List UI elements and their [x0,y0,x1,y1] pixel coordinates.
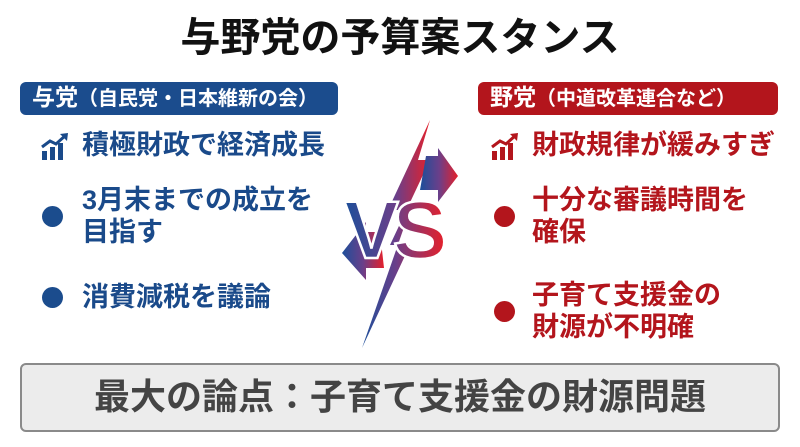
left item 2 [42,185,313,247]
label: opposition: 野党（中道改革連合など） [490,84,736,110]
right item 2: 十分な審議時間を [532,185,748,215]
bottom callout [20,363,780,432]
label: ruling party: 与党（自民党・日本維新の会） [32,84,318,110]
VS emblem: VS [344,185,445,276]
right item 3: 子育て支援金の [532,280,721,310]
icon: chart up red [491,133,518,160]
right item 2 [494,185,748,247]
bottom callout: 最大の論点：子育て支援金の財源問題 [94,376,706,417]
left item 1: 積極財政で経済成長 [82,130,325,160]
VS emblem [342,120,458,348]
label: opposition [478,82,778,115]
right item 3: 財源が不明確 [532,312,694,342]
right item 3 [494,280,721,342]
left item 2: 3月末までの成立を [82,185,313,215]
left item 2: 目指す [82,217,163,247]
right item 2: 確保 [532,217,586,247]
icon: chart up [41,133,68,160]
title: 与野党の予算案スタンス [180,16,620,60]
left item 3: 消費減税を議論 [82,282,271,312]
right item 1: 財政規律が緩みすぎ [532,130,775,160]
